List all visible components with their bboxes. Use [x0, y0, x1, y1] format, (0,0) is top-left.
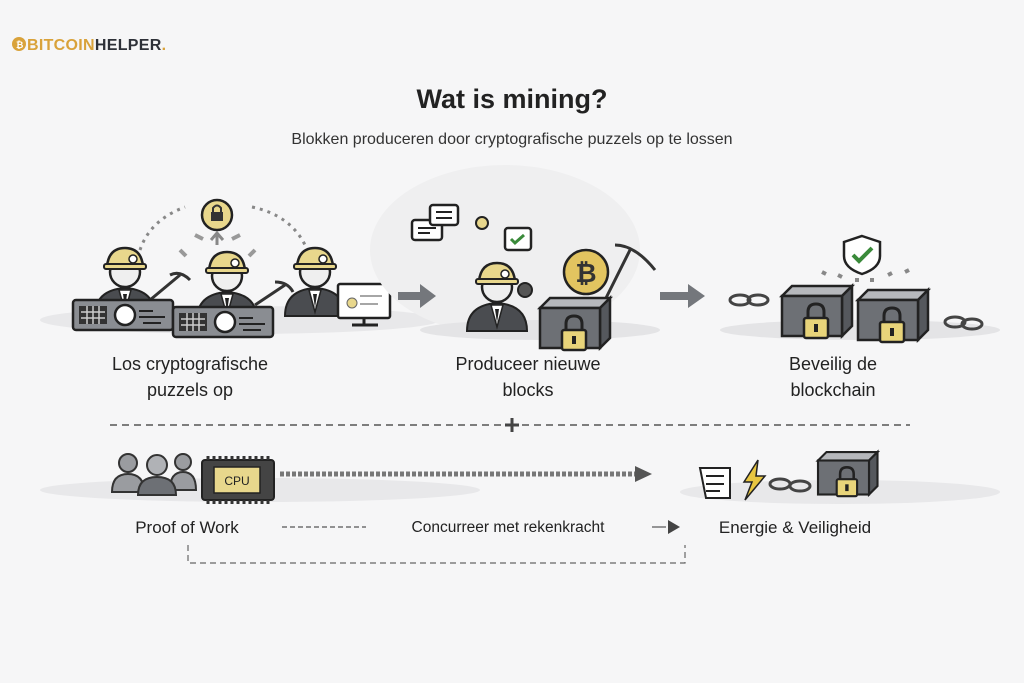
panel: produce blocks: [370, 165, 660, 350]
plus sign: [505, 418, 519, 432]
icon: shield: [844, 236, 880, 274]
label: step 3: Beveilig de: [789, 354, 877, 374]
icon: monitor: [338, 284, 390, 325]
label: compete: Concurreer met rekenkracht: [412, 519, 605, 536]
icon: bitcoin coin: [564, 250, 608, 294]
arrow 1: [398, 284, 436, 308]
icon: bottom lockbox: [818, 452, 878, 496]
label: energy: Energie & Veiligheid: [719, 518, 871, 537]
panel: secure blockchain: [720, 236, 1000, 342]
logo: ₿: [16, 40, 23, 50]
icon: chat bubbles: [412, 205, 531, 250]
label: step 3: blockchain: [790, 380, 876, 400]
icon: people: [112, 454, 196, 495]
bracket: [188, 545, 685, 563]
title: Wat is mining?: [416, 84, 608, 114]
label: step 2: blocks: [502, 380, 554, 400]
label: step 1: Los cryptografische: [112, 354, 268, 374]
bottom row: [40, 452, 1000, 504]
icon: energy document: [700, 460, 765, 500]
arrow 2: [660, 284, 705, 308]
icon: CPU: [202, 456, 274, 504]
label: proof of work: Proof of Work: [135, 518, 239, 537]
arrow: dotted: [280, 466, 652, 482]
label: step 2: Produceer nieuwe: [455, 354, 601, 374]
label: step 1: puzzels op: [147, 380, 233, 400]
subtitle: Blokken produceren door cryptografische puzzels op te lossen: [291, 131, 733, 148]
label: compete: [282, 519, 680, 536]
icon: bitcoin coin: ₿: [575, 258, 597, 288]
icon: CPU: CPU: [224, 474, 250, 488]
panel: solve puzzles: [40, 200, 440, 337]
icon: central lock: [202, 200, 232, 230]
logo: BITCOINHELPER.: [27, 37, 166, 54]
